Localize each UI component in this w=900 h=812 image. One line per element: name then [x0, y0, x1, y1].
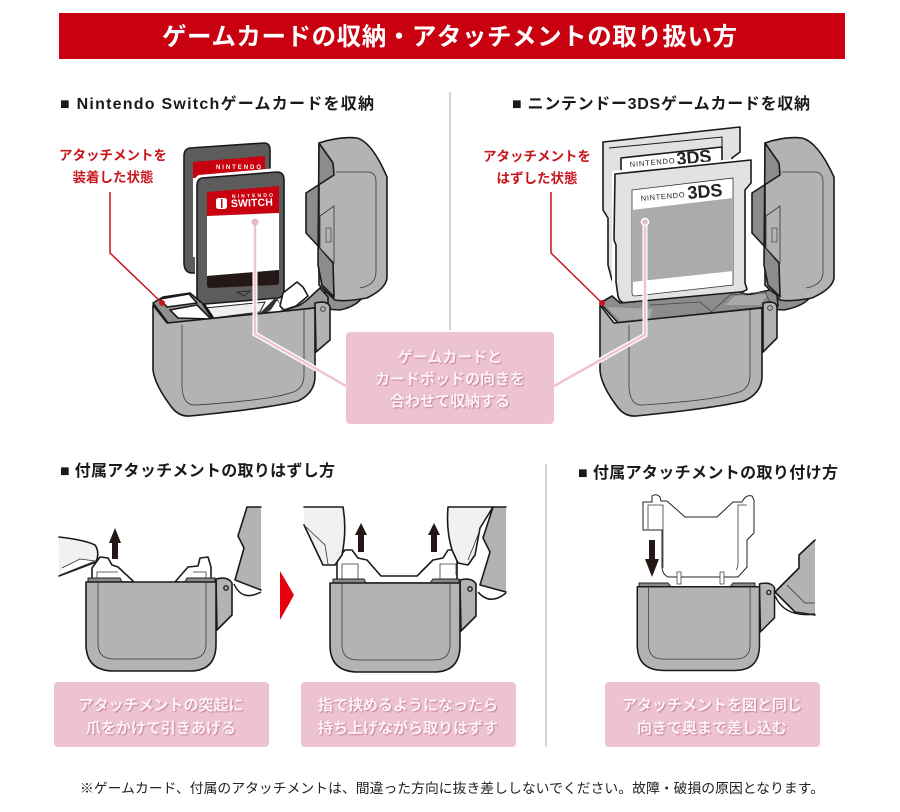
back card: NINTENDO: [216, 165, 261, 171]
callout: align card and pod: ゲームカードと: [398, 348, 502, 366]
caption: step 2: 指で挟めるようになったら: [318, 696, 498, 714]
caption: step 1: アタッチメントの突起に: [78, 696, 244, 714]
front card: SWITCH: [231, 197, 273, 210]
front 3DS card: NINTENDO: [640, 190, 685, 203]
illustration: Switch card pod: [153, 138, 387, 416]
callout line: Switch card direction: [252, 218, 346, 386]
caption: step 1: 爪をかけて引きあげる: [86, 720, 236, 737]
caption: step 2: 持ち上げながら取りはずす: [318, 719, 498, 737]
illustration: step 3: [637, 495, 815, 670]
label: attachment on: アタッチメントを: [59, 148, 167, 163]
case body: [600, 302, 777, 416]
heading: 3DS cards: ■ ニンテンドー3DSゲームカードを収納: [512, 94, 810, 113]
front 3DS card: 3DS: [687, 180, 723, 203]
callout: align card and pod: カードポッドの向きを: [375, 371, 525, 388]
title banner: ゲームカードの収納・アタッチメントの取り扱い方: [162, 23, 737, 51]
back card: [184, 143, 270, 273]
case rim: [600, 290, 778, 323]
caption: step 1: [54, 682, 269, 747]
case body: [153, 302, 330, 416]
lid: [306, 138, 387, 310]
heading: removal: ■ 付属アタッチメントの取りはずし方: [60, 461, 335, 480]
callout: align card and pod: [346, 332, 554, 424]
caption: step 3: 向きで奥まで差し込む: [637, 719, 787, 737]
caption: step 3: [605, 682, 820, 747]
illustration: step 1: [59, 507, 261, 671]
callout line: 3DS card direction: [554, 218, 648, 386]
title banner: [59, 13, 845, 59]
lid: [752, 138, 834, 310]
front 3DS card: [612, 157, 754, 306]
heading: Switch cards: ■ Nintendo Switchゲームカードを収納: [60, 94, 374, 113]
label: attachment off: [483, 149, 605, 306]
attachment and case rim: [153, 282, 328, 323]
label: attachment on: [59, 148, 167, 306]
back 3DS card: 3DS: [676, 146, 712, 169]
caption: step 3: アタッチメントを図と同じ: [622, 697, 802, 714]
callout: align card and pod: 合わせて収納する: [390, 393, 510, 410]
back 3DS card: NINTENDO: [629, 156, 675, 169]
label: attachment off: はずした状態: [496, 170, 578, 186]
illustration: 3DS card pod: [600, 127, 834, 416]
footnote: ※ゲームカード、付属のアタッチメントは、間違った方向に抜き差ししないでください。故障・破損の原因となります。: [80, 781, 824, 796]
heading: attach: ■ 付属アタッチメントの取り付け方: [578, 463, 838, 482]
caption: step 2: [301, 682, 516, 747]
illustration: step 2: [304, 507, 506, 672]
label: attachment on: 装着した状態: [72, 169, 154, 185]
front card: NINTENDO: [232, 193, 273, 200]
back 3DS card: [603, 127, 740, 280]
label: attachment off: アタッチメントを: [483, 149, 591, 164]
arrow: next step: [280, 571, 294, 620]
front card: [195, 168, 287, 307]
